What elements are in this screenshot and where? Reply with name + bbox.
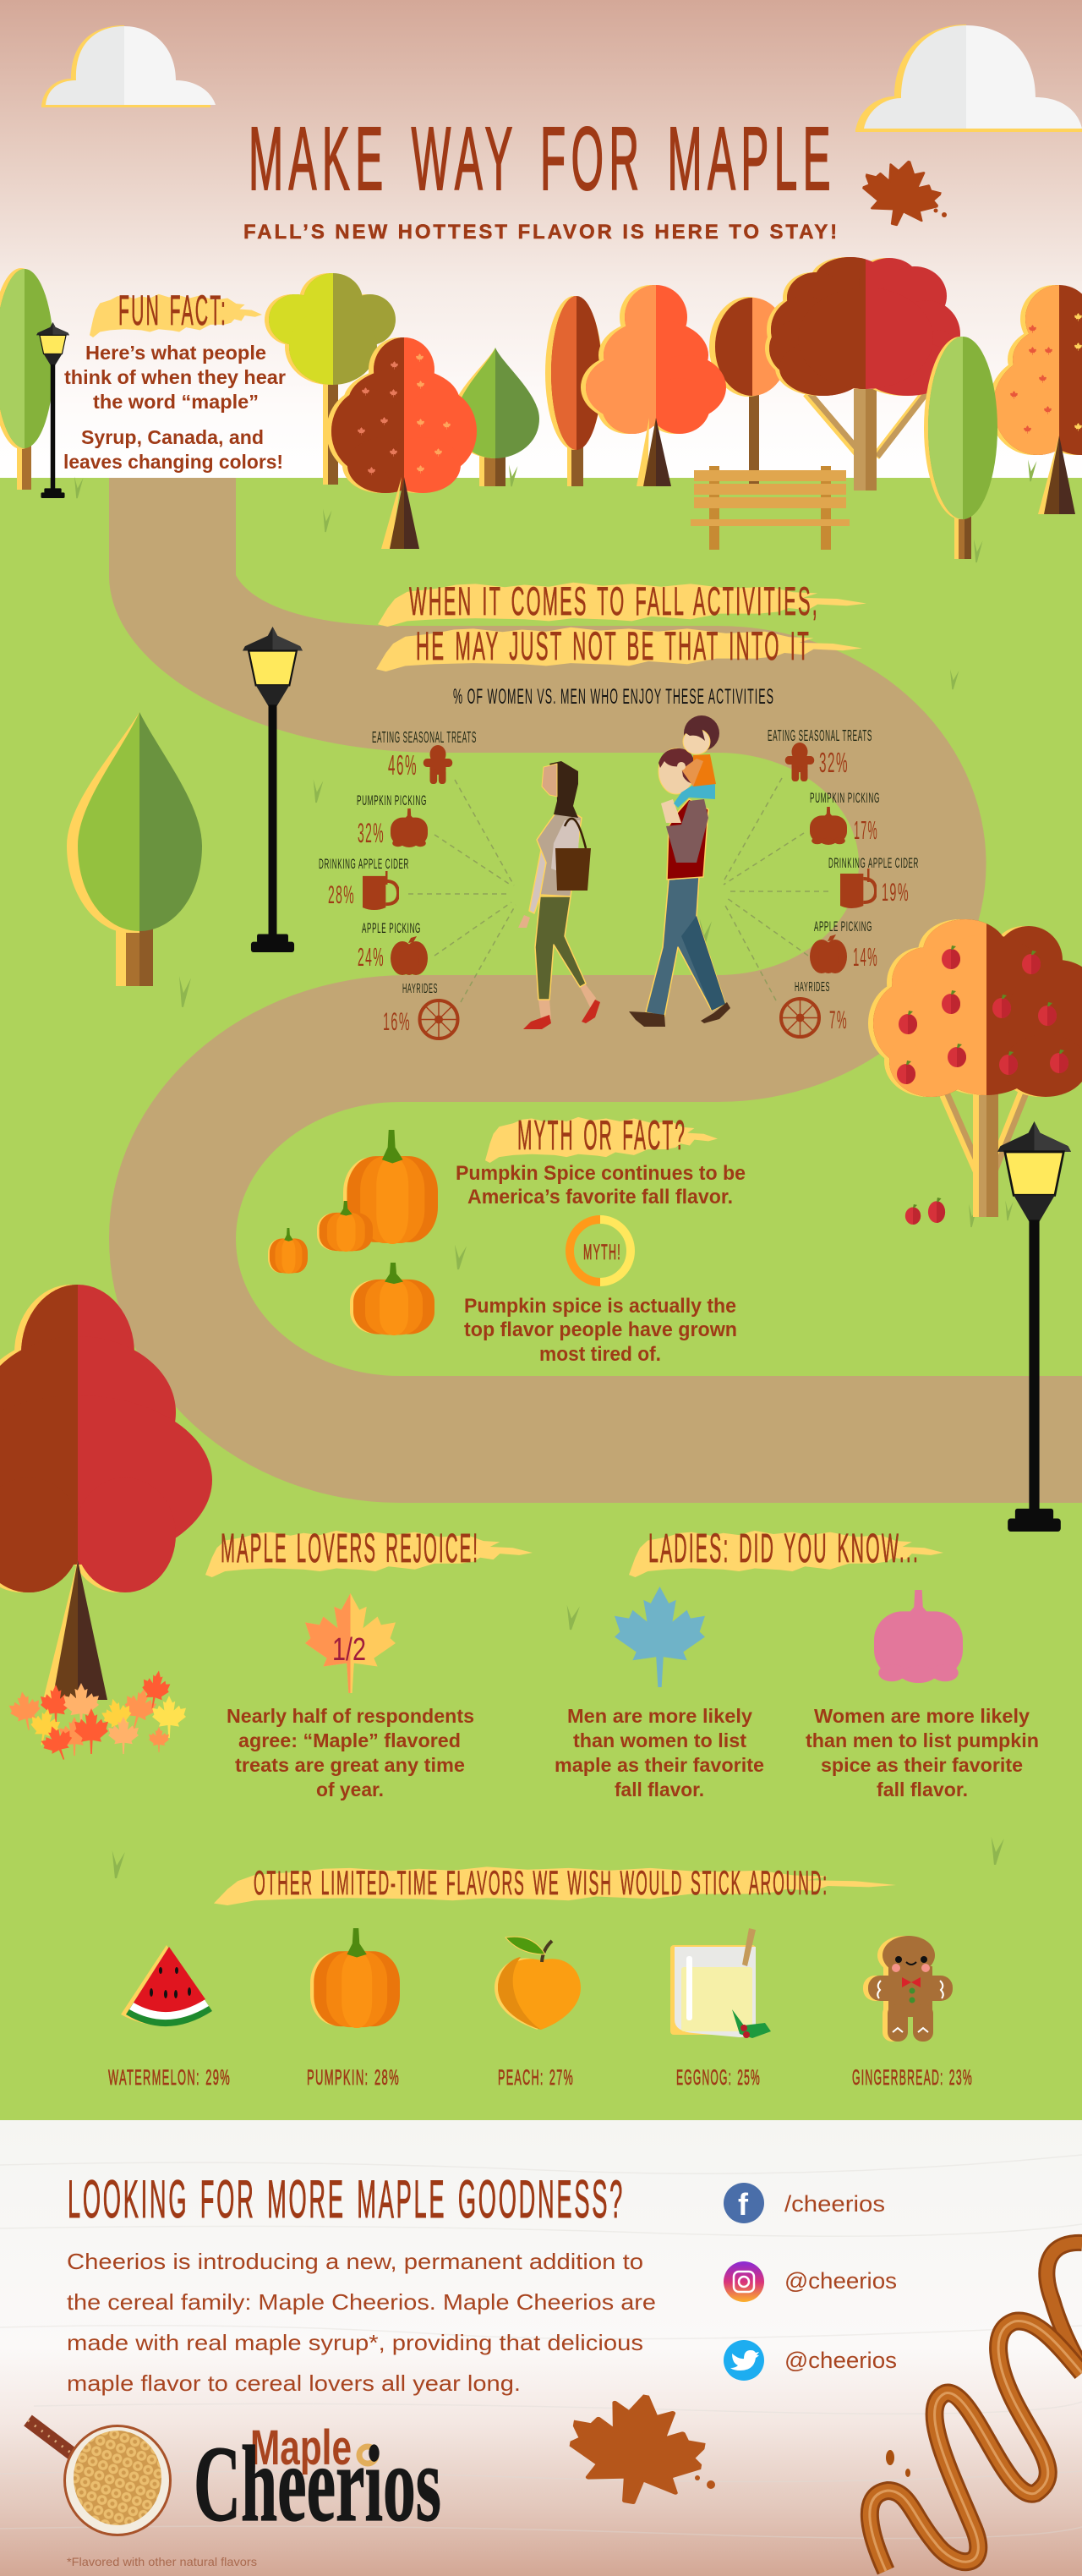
hayrides men <box>781 980 848 1037</box>
apple picking women: APPLE PICKING <box>362 920 421 936</box>
winding path <box>109 478 1082 1503</box>
fun fact text: Here’s what people <box>85 342 266 364</box>
icon: half maple leaf <box>305 1593 396 1693</box>
panel: men activities: 17% <box>854 815 878 845</box>
flavor labels: PUMPKIN: 28% <box>307 2066 400 2090</box>
footer wood background <box>0 2120 1082 2576</box>
social: twitter: @cheerios <box>784 2348 897 2373</box>
subtitle: FALL’S NEW HOTTEST FLAVOR IS HERE TO STAY! <box>243 221 839 244</box>
syrup maple leaf <box>562 2383 715 2513</box>
text: men fact <box>555 1705 764 1800</box>
pumpkins group <box>268 1130 438 1335</box>
fun fact text: think of when they hear <box>64 366 286 388</box>
myth ring: MYTH! <box>583 1241 621 1264</box>
footer paragraph: made with real maple syrup*, providing that delicious <box>67 2330 643 2355</box>
tree: large red with branches <box>765 257 960 491</box>
tree: apple tree <box>868 919 1082 1217</box>
text: women fact: spice as their favorite <box>821 1754 1023 1776</box>
myth statement: Pumpkin Spice continues to be <box>456 1162 746 1185</box>
icon: half maple leaf: 1/2 <box>332 1632 366 1668</box>
pumpkin picking women: 32% <box>358 818 385 848</box>
other flavors heading <box>214 1865 896 1905</box>
text: women fact <box>806 1705 1039 1800</box>
flavor labels: WATERMELON: 29% <box>108 2066 231 2090</box>
syrup swirl <box>870 2243 1082 2571</box>
social: facebook <box>724 2183 885 2223</box>
maple lovers heading <box>205 1526 533 1577</box>
illustration: woman walking <box>518 761 600 1029</box>
myth answer: top flavor people have grown <box>464 1318 737 1341</box>
small lamp post <box>36 322 69 498</box>
eating seasonal treats men <box>768 727 872 781</box>
tree: green teardrop <box>451 348 539 486</box>
fun fact text: leaves changing colors! <box>63 451 283 473</box>
logo: maple cheerios: Cheerios <box>194 2424 441 2544</box>
myth or fact heading: MYTH OR FACT? <box>517 1113 686 1159</box>
cereal bowl <box>28 2420 172 2536</box>
pumpkin picking men <box>810 790 880 845</box>
panel: women activities <box>319 729 477 1039</box>
social: twitter <box>724 2340 897 2381</box>
panel: women activities: PUMPKIN PICKING <box>357 792 427 808</box>
text: women fact: than men to list pumpkin <box>806 1729 1039 1751</box>
fun fact text <box>63 342 286 473</box>
cloud: left <box>41 25 216 107</box>
panel: men activities: PUMPKIN PICKING <box>810 790 880 806</box>
tree: orange at right edge <box>988 285 1082 514</box>
large lamp post right <box>997 1121 1071 1532</box>
footer paragraph: Cheerios is introducing a new, permanent addition to <box>67 2249 643 2274</box>
pumpkin picking women <box>357 792 428 848</box>
fun fact heading: FUN FACT: <box>118 287 227 334</box>
myth answer <box>464 1295 737 1366</box>
tree: yellow-green <box>265 273 396 485</box>
myth statement: America’s favorite fall flavor. <box>467 1186 733 1209</box>
logo: maple cheerios: Maple <box>250 2420 352 2475</box>
text: women fact: Women are more likely <box>814 1705 1030 1727</box>
fun fact text: the word “maple” <box>93 391 259 413</box>
text: maple lovers <box>227 1705 474 1800</box>
park bench <box>691 466 850 550</box>
footer paragraph: maple flavor to cereal lovers all year long. <box>67 2370 521 2396</box>
footer paragraph: the cereal family: Maple Cheerios. Maple Cheerios are <box>67 2289 656 2315</box>
social: facebook: /cheerios <box>784 2191 885 2217</box>
chart subtitle: % OF WOMEN VS. MEN WHO ENJOY THESE ACTIVITIES <box>453 685 774 709</box>
large green tree <box>67 712 202 986</box>
dashed connector lines <box>408 778 828 1002</box>
myth or fact heading <box>485 1113 718 1163</box>
flavor: pumpkin <box>310 1928 400 2028</box>
grass tufts <box>74 460 1036 1878</box>
text: men fact: maple as their favorite <box>555 1754 764 1776</box>
fallen leaf pile <box>7 1669 186 1765</box>
hayrides women: 16% <box>383 1008 411 1036</box>
myth answer: most tired of. <box>539 1343 661 1366</box>
hayrides women: HAYRIDES <box>402 982 438 996</box>
footer paragraph <box>67 2249 656 2396</box>
eating seasonal treats men: 32% <box>819 747 849 778</box>
apples on tree <box>897 945 1068 1084</box>
tree: orange <box>581 285 726 486</box>
social: facebook: f <box>738 2187 749 2222</box>
grass background <box>0 478 1082 2123</box>
icon: blue maple leaf <box>615 1587 705 1687</box>
drinking apple cider women: 28% <box>328 881 355 909</box>
sky background <box>0 0 1082 478</box>
text: women fact: fall flavor. <box>877 1779 968 1800</box>
logo: maple cheerios <box>194 2420 441 2544</box>
panel: men activities: EATING SEASONAL TREATS <box>768 727 872 744</box>
large lamp post left <box>243 627 303 952</box>
panel: men activities <box>768 727 919 1037</box>
footnote: *Flavored with other natural flavors <box>67 2555 257 2568</box>
text: DRINKING APPLE CIDER <box>828 855 919 871</box>
cloud: right <box>855 25 1082 132</box>
flavor: peach <box>495 1937 581 2030</box>
flavor: eggnog <box>670 1928 771 2038</box>
myth statement <box>456 1162 746 1209</box>
text: maple lovers: Nearly half of respondents <box>227 1705 474 1727</box>
text: maple lovers: treats are great any time <box>235 1754 465 1776</box>
tree: tall green left <box>0 268 54 490</box>
icon: syrup maple leaf <box>855 151 947 233</box>
icon: pink pumpkin <box>874 1590 963 1683</box>
text: EATING SEASONAL TREATS <box>372 729 477 746</box>
fun fact text: Syrup, Canada, and <box>81 426 264 448</box>
drinking apple cider men: 19% <box>882 879 910 907</box>
tree: rounded dark orange <box>709 297 779 484</box>
heading: fall activities <box>376 578 866 671</box>
flavor: watermelon <box>121 1945 212 2026</box>
panel: men activities: 7% <box>829 1006 848 1034</box>
tree: tall green right <box>924 337 997 559</box>
panel: women activities: DRINKING APPLE CIDER <box>319 856 409 872</box>
myth ring <box>570 1219 631 1282</box>
text: maple lovers: of year. <box>316 1779 384 1800</box>
tree: red-orange with leaves <box>326 337 477 549</box>
myth answer: Pumpkin spice is actually the <box>464 1295 736 1318</box>
text: men fact: than women to list <box>573 1729 746 1751</box>
social: instagram: @cheerios <box>784 2268 897 2294</box>
panel: men activities: 14% <box>853 942 878 972</box>
fun fact heading <box>90 287 262 337</box>
fallen apples <box>905 1198 945 1225</box>
drinking apple cider women <box>319 856 409 910</box>
maple lovers heading: MAPLE LOVERS REJOICE! <box>221 1526 479 1571</box>
apple picking women: 24% <box>358 942 385 972</box>
illustration: man carrying child <box>629 715 730 1027</box>
social: instagram <box>724 2261 897 2302</box>
text: maple lovers: agree: “Maple” flavored <box>238 1729 461 1751</box>
eating seasonal treats women <box>372 729 477 784</box>
tree: tall orange ellipse <box>545 296 603 486</box>
hayrides women <box>383 982 458 1039</box>
flavor labels <box>108 2066 973 2090</box>
apple picking women <box>358 920 428 975</box>
hayrides men: HAYRIDES <box>795 980 830 995</box>
flavor: gingerbread <box>863 1936 953 2042</box>
eating seasonal treats women: 46% <box>388 749 418 781</box>
apple picking men: APPLE PICKING <box>814 918 872 934</box>
ladies heading <box>629 1526 943 1577</box>
flavor labels: EGGNOG: 25% <box>676 2066 761 2090</box>
apple picking men <box>810 918 878 973</box>
flavor labels: PEACH: 27% <box>498 2066 574 2090</box>
drinking apple cider men <box>828 855 919 908</box>
tree: big red lower left <box>0 1285 212 1700</box>
panel: footer <box>0 2120 1082 2576</box>
text: men fact: fall flavor. <box>615 1779 704 1800</box>
text: men fact: Men are more likely <box>567 1705 752 1727</box>
